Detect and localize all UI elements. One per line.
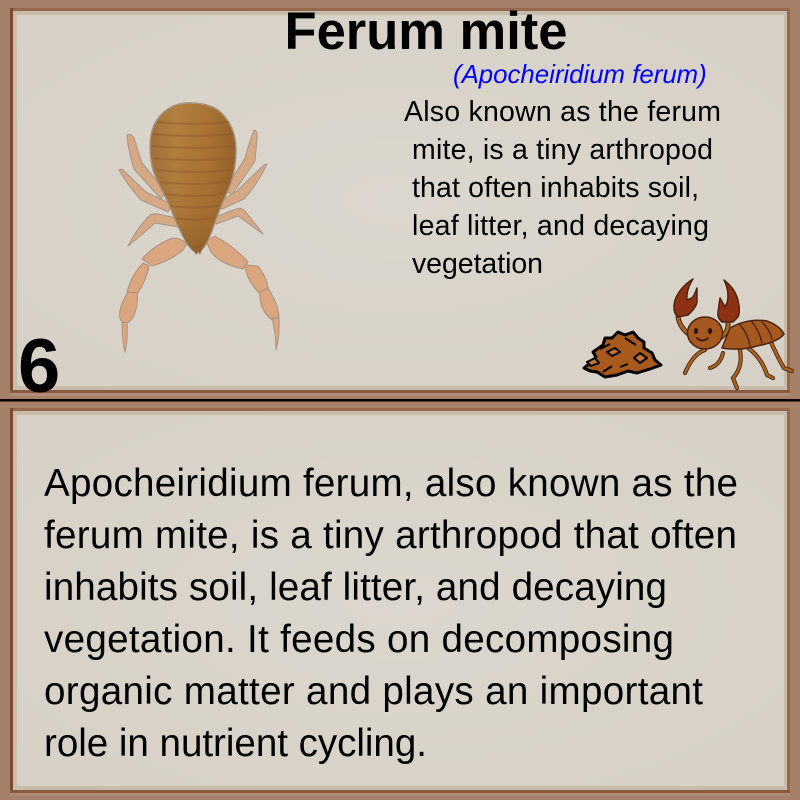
mouth (192, 246, 203, 255)
left pincer (120, 238, 187, 352)
right claw (718, 280, 739, 322)
illustration: pseudoscorpion (119, 103, 279, 352)
legs (685, 340, 792, 388)
body text: Apocheiridium ferum, also known as the (44, 462, 738, 505)
card number: 6 (18, 324, 60, 409)
left claw (674, 279, 697, 317)
body text: inhabits soil, leaf litter, and decaying (44, 566, 667, 609)
abdomen (722, 320, 784, 349)
legs (119, 130, 267, 246)
icon: leaf litter pile (584, 332, 661, 377)
title: Ferum mite (285, 2, 567, 61)
right pincer (206, 236, 279, 350)
body text: role in nutrient cycling. (44, 722, 427, 765)
short description: vegetation (412, 248, 543, 280)
short description: leaf litter, and decaying (412, 210, 709, 242)
panel: bottom card (0, 400, 800, 800)
short description: Also known as the ferum (404, 96, 721, 128)
eyes (694, 328, 698, 334)
icon: cartoon mite (674, 279, 792, 388)
short description: that often inhabits soil, (412, 172, 699, 204)
body (150, 103, 236, 253)
arms (678, 317, 728, 338)
head (688, 317, 722, 349)
body text: vegetation. It feeds on decomposing (44, 618, 674, 661)
panel: top card (0, 0, 800, 400)
body text: ferum mite, is a tiny arthropod that often (44, 514, 737, 557)
body text: organic matter and plays an important (44, 670, 703, 713)
short description: mite, is a tiny arthropod (412, 134, 713, 166)
divider line (0, 399, 800, 402)
body segments (152, 122, 235, 220)
short description (404, 96, 721, 280)
scientific name: (Apocheiridium ferum) (453, 61, 707, 89)
body text (44, 462, 738, 765)
smile (697, 338, 708, 340)
